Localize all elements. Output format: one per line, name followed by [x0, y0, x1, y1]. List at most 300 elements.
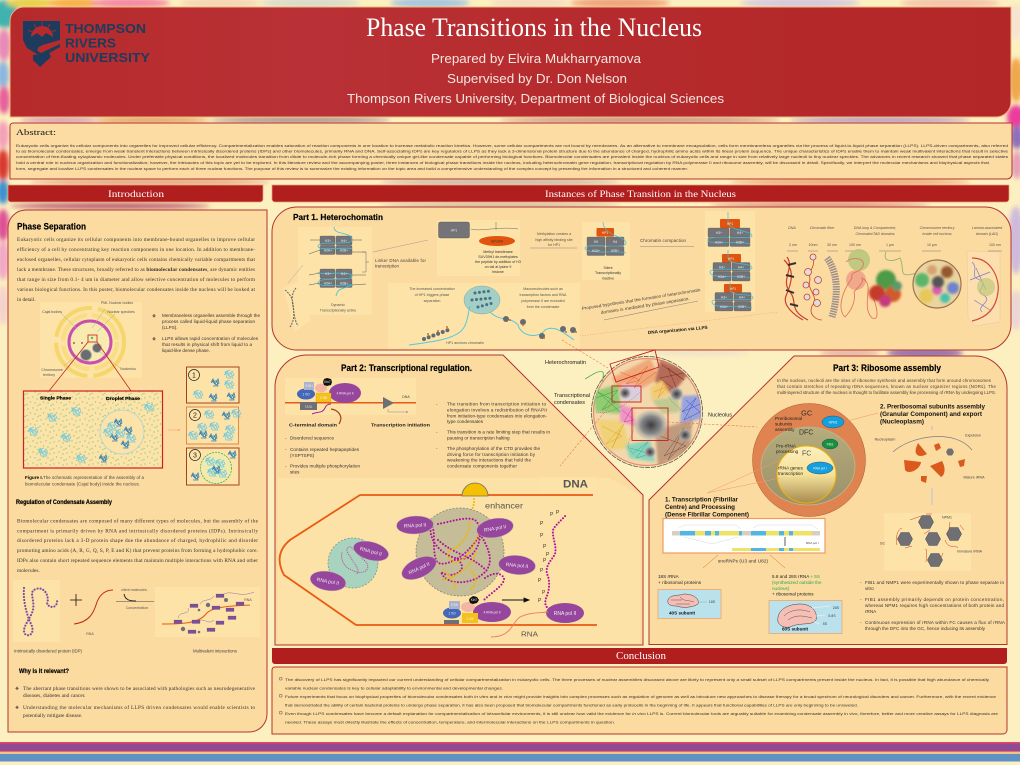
figure: silent nucleosome: Transcriptionally [595, 271, 621, 275]
transition bullets: This transition is a rate limiting step that results in [447, 430, 550, 434]
figure: transcription initiation complex [285, 378, 416, 415]
CTD bullets [285, 436, 360, 474]
figure: cell nucleus with cajal body: Nuclear speckles [107, 310, 135, 314]
relevance bullets [15, 686, 256, 719]
figure: silent nucleosome: HP1 [602, 231, 608, 235]
figure: compacted nucleosome stacks: H4+ [738, 266, 744, 270]
label: transcription initiation: Transcription initiation [371, 422, 430, 428]
authors and affiliation: Thompson Rivers University, Department of Biological Sciences [347, 91, 725, 106]
relevance bullets: ❖ [15, 686, 20, 691]
figure: nucleolus layers: transcription [778, 471, 803, 476]
DNA label: DNA [563, 478, 588, 490]
abstract text: form, segregate and localize LLPS condensates in the nuclear space to perform each of three nuclear functions. The purpose of this review is to summarize the existing information on the topic area and build a comprehensive understanding of the complex concept by presenting the information in a structured and coherent manner. [16, 167, 688, 171]
figure: immature rRNA in GC [880, 513, 983, 571]
authors and affiliation [347, 51, 725, 106]
polymerase complex at promoter: 4 RNA pol II [483, 610, 501, 614]
box 3: condensed droplet: 3 [193, 452, 197, 460]
figure: 60S subunit: 60S subunit [782, 626, 808, 632]
phosphorylated CTD [538, 510, 566, 610]
heading: step 1: Centre) and Processing [665, 504, 735, 511]
phosphorylated CTD: P [538, 598, 542, 604]
label: methylation creates HP1 binding site: Methylation creates a [537, 232, 571, 236]
figure: cell nucleus with cajal body: Nucleolus [120, 367, 136, 371]
figure: 40S subunit: 40S subunit [669, 610, 695, 616]
RNA transcript [491, 612, 548, 638]
figure: cell nucleus with cajal body: territory [43, 373, 55, 377]
section bar: instances: Instances of Phase Transition in the Nucleus [545, 189, 736, 200]
panel: part 1 heterochromatin [272, 207, 1011, 350]
figure: RNA strand: RNA [86, 632, 94, 636]
polymerase complex at promoter: Kin7 [471, 598, 477, 602]
figure: HP1 phase separation: separation [424, 299, 440, 303]
RNA pol II ellipses: RNA pol II [484, 524, 507, 534]
CTD bullets: Contains repeated heptapeptides [290, 447, 360, 452]
figure: SUV39H1 methylation: SUV39H1 de-methylates [478, 255, 518, 259]
panel: part 2 transcriptional regulation [275, 355, 643, 645]
part 3 bullets: FIB1 and NMP1 were experimentally shown to phase separate in [865, 580, 1004, 585]
figure: RNA strand [74, 590, 113, 636]
nucleus labels: condensates [554, 400, 585, 406]
RNA pol II ellipses: RNA pol II [408, 561, 431, 576]
phosphorylated CTD: P [550, 512, 554, 518]
intro paragraph: lack a membrane. These structures, broadly referred to as biomolecular condensates, are dynamic entities [17, 266, 255, 273]
figure: SUV39H1 methylation: the peptide by addition of H3 [475, 260, 521, 264]
section bar: conclusion [272, 648, 1007, 664]
header banner [10, 7, 1011, 117]
transition bullets: driving force for transcription initiation by [447, 452, 536, 457]
figure: immature rRNA in GC: GC [880, 542, 886, 546]
bullets: membraneless organelles: ❖ [152, 336, 157, 342]
part 3 bullets: rRNA [865, 609, 877, 614]
figure: compacted nucleosome stacks: H2B+ [736, 240, 744, 244]
chromatin scale bars: 10 µm [927, 243, 937, 247]
transition bullets: The transition from transcription initiation to [447, 402, 546, 406]
figure: SUV39H1 methylation: histone [492, 270, 504, 274]
chromatin scale labels [788, 226, 1003, 236]
abstract text: Eukaryotic cells organize its cellular components into organelles for improved cellular efficiency. Compartmentalization enables saturation of reaction components in one location to increase metabolic reaction kinetics. However, some cellular compartments are not bound by membranes. As an alternative to membrane encapsulation, cells form membraneless organelles via the process of liquid-to-liquid phase separation (LLPS). LLPS-driven compartments, also referred [16, 144, 1008, 148]
FIB1 marker: FIB1 [827, 442, 834, 446]
chromatin scale bars: 100 nm [849, 243, 861, 247]
figure caption: The schematic representation of the assembly of a [43, 475, 145, 480]
figure: immature rRNA in GC: Immature rRNA [957, 550, 983, 554]
figure: nucleolus layers [752, 404, 866, 516]
label: 5.8 and 28S rRNA: (synthesized outside the [772, 580, 822, 585]
label: snoRNPs: snoRNPs (U3 and U82) [718, 558, 768, 564]
authors and affiliation: Supervised by Dr. Don Nelson [447, 71, 627, 86]
enhancer [462, 483, 523, 522]
heading: part 1: Part 1. Heterochomatin [293, 212, 383, 222]
figure: SUV39H1 methylation [437, 220, 521, 276]
RNA pol II ellipses: RNA pol II [316, 577, 339, 587]
enhancer: enhancer [485, 502, 523, 510]
abstract text: concentration of free-floating cytoplasmic molecules. Under preferable physical conditions, the localized molecules transition from dilute to molecule-rich phase forming a chemically unique gel-like condensate capable of performing biological functions. Biomolecular condensates are prevalent inside the nucleus of eukaryotic cells and range in size from relatively large nucleoli to tiny nuclear speckles. The advances in recent research showed that phase separated states [16, 155, 1008, 159]
intro paragraph: enclosed organelles, cellular cytoplasm of eukaryotic cells contains chemically variable compartments that [17, 256, 256, 263]
bullets: membraneless organelles [152, 313, 260, 353]
transition bullets: elongation involves a redistribution of RNAPII [447, 408, 547, 412]
relevance bullets: Understanding the molecular mechanisms of LLPS driven condensates would enable scientists to [23, 704, 255, 711]
figure: silent nucleosome [582, 222, 630, 280]
label: 5.8 and 28S rRNA: + ribosomal proteins [772, 592, 814, 596]
polymerase complex at promoter: 5 BH [451, 603, 459, 607]
conclusion bullets: needed. These assays most directly illustrate the effects of concentration, temperature, and intermolecular interactions on the LLPS compartments in question. [285, 720, 615, 724]
figure: 60S subunit: 5S [823, 622, 828, 626]
figure: SUV39H1 methylation: on tail at lysine 9 [485, 265, 511, 269]
heading: step 1: (Dense Fibrillar Component) [665, 512, 749, 518]
figure: HP1 phase separation [388, 283, 580, 349]
label: C-terminal domain: C-terminal domain [289, 422, 337, 428]
figure: HP1 phase separation: transcription factors and RNA [520, 293, 567, 297]
figure: single phase and droplet phase: Droplet Phase [106, 396, 140, 402]
red selection boxes [610, 350, 668, 440]
figure: active nucleosomes: H4+ [341, 239, 347, 243]
figure: transcription initiation complex: Kin7 [324, 380, 331, 384]
figure: cell nucleus with cajal body: Chromosome [41, 368, 63, 372]
figure: rDNA transcription unit [663, 518, 825, 553]
figure: transcription initiation complex: 2 Mit [320, 396, 327, 400]
figure: HP1 phase separation: Macromolecules such as [523, 287, 563, 291]
intro paragraph: that range in size from 0.1- 4 um in diameter and allow selective concentration of molecules to perform [17, 276, 256, 283]
figure: single phase and droplet phase: Single Phase [40, 396, 71, 402]
figure: nucleolus layers: subunits [775, 422, 793, 426]
transition bullets: weakening the interactions that hold the [447, 458, 531, 462]
figure: SUV39H1 methylation: Methyl transferase [483, 250, 513, 254]
dotted connector [580, 312, 778, 336]
regulation paragraph [17, 518, 259, 574]
figure captions: Intrinsically disordered protein (IDP) [14, 648, 83, 654]
figure: 40S subunit: 18S [709, 600, 716, 604]
leader lines from nucleolus [707, 460, 780, 493]
elongating polymerase [546, 603, 584, 623]
CTD bullets: Provides multiple phosphorylation [290, 464, 360, 468]
box 1: dilute molecules [186, 367, 239, 403]
plus sign [70, 594, 82, 606]
figure: cell nucleus with cajal body: Cajal bodies [42, 310, 62, 314]
part 3 introduction: that contain stretches of repeating rDNA sequences, known as nuclear organizer regions (NORs). The [777, 384, 997, 389]
nucleus callout lines [560, 340, 757, 466]
figure: silent nucleosome: H2B+ [611, 249, 619, 253]
figure: compacted nucleosome stacks: H4+ [739, 296, 745, 300]
figure: mature rRNA expulsion: Expulsion [965, 434, 981, 438]
regulation paragraph: molecules. [17, 568, 40, 574]
chromatin scale bars: 10nm [808, 243, 818, 247]
label: DNA organization via LLPS: DNA organization via LLPS [648, 325, 708, 335]
relevance bullets: ❖ [15, 705, 20, 710]
footer stripes [0, 742, 1020, 762]
figure: nucleolus layers: Pre-rRNA [776, 444, 797, 448]
abstract heading: Abstract: [16, 128, 56, 137]
conclusion bullets: The discovery of LLPS has significantly impacted our current understanding of cellular compartmentalization in eukaryotic cells. The three processes of nuclear assemblies discussed above are likely to represent only a small subset of LLPS compartments present inside the nucleus. In fact, it is possible that high abundance of chemically [285, 677, 989, 682]
figure: transcription initiation complex: DNA [402, 395, 410, 399]
figure: immature rRNA in GC: NPM1 [942, 516, 952, 520]
transition bullets: The phosphorylation of the CTD provides the [447, 446, 540, 451]
chromatin scale bars: 30 nm [827, 243, 837, 247]
chromatin scale labels: Lamina-associated [972, 226, 1003, 230]
label: 18S rRNA: + ribosomal proteins [658, 580, 702, 585]
relevance bullets: diseases, diabetes and cancer. [23, 693, 86, 699]
part 3 bullets: - [860, 580, 862, 585]
figure: multivalent interactions [155, 587, 260, 637]
RNA pol I marker: RNA pol I [813, 466, 827, 470]
transition bullets: type condensates [447, 419, 484, 424]
heading: step 1: 1. Transcription (Fibrillar [665, 496, 739, 504]
chromatin scale bars: 2 nm [789, 243, 797, 247]
figure caption: biomolecular condensate (Cajal body) inside the nucleus. [25, 482, 140, 486]
conclusion bullets: variable nuclear condensates is key to cellular adaptability to environmental and developmental changes. [285, 686, 503, 690]
section bar: instances [272, 185, 1009, 202]
conclusion bullets: Even though LLPS condensates have become a default explanation for compartmentalization of intracellular environments, it is still unclear how valid the evidence for in vivo LLPS is. Current biomolecular tools are arguably suitable for examining condensate assembly in vivo, therefore, better and more creative assays for LLPS diagnosis are [285, 711, 999, 716]
figure captions [14, 648, 238, 654]
label: linker DNA: transcription [375, 264, 399, 268]
figure: active nucleosomes: H2A+ [324, 248, 332, 252]
panel: conclusion [272, 667, 1007, 734]
figure: active nucleosomes: H2A+ [324, 282, 332, 286]
RNA pol II ellipses: RNA pol II [505, 562, 528, 570]
figure: compacted nucleosome stacks: H2A+ [718, 275, 726, 279]
figure: nucleus with chromosome territories [545, 340, 757, 468]
intro paragraph: Eukaryotic cells organize its cellular components into membrane-bound organelles to improve cellular [17, 237, 255, 243]
figure: nucleolus layers: rRNA genes [778, 466, 803, 470]
logo: Thompson Rivers University: UNIVERSITY [65, 51, 151, 65]
NPM1 marker: NPM1 [829, 420, 838, 424]
bullets: membraneless organelles: liquid-like dense phase. [162, 348, 210, 353]
figure: silent nucleosome: H4 [613, 240, 617, 244]
abstract panel [10, 123, 1012, 179]
figure: SUV39H1 methylation: SUV39H [491, 240, 504, 244]
chromatin scale bars: 1 µm [886, 243, 894, 247]
RNA pol II ellipses: RNA pol II [404, 522, 426, 530]
small condensate [328, 538, 378, 588]
relevance bullets: The aberrant phase transitions were shown to be associated with pathologies such as neurodegenerative [23, 686, 256, 692]
figure: DNA helix [283, 265, 311, 332]
phosphorylated CTD: P [543, 544, 547, 550]
transition bullets: pausing or transcription halting [447, 436, 510, 440]
phosphorylated CTD: P [540, 568, 544, 574]
box 2: clustering molecules: 2 [193, 412, 197, 420]
heading: phase separation: Phase Separation [17, 222, 86, 232]
figure: compacted nucleosome stacks: H4+ [737, 231, 743, 235]
figure: compacted nucleosome stacks: H2B+ [737, 275, 745, 279]
figure: compacted nucleosome stacks: H2A+ [720, 305, 728, 309]
regulation paragraph: disordered proteins lack a 3-D protein shape due the abundance of charged, hydrophilic and disorder [17, 537, 258, 544]
arrow: C-terminal domain [331, 409, 341, 424]
figure: compacted nucleosome stacks [705, 211, 755, 312]
conclusion bullets: Future experiments that focus on biophysical properties of biomolecular condensates both in vitro and in vivo might provide insights into complex processes such as regulation of genome as well as introduce new approaches to disease therapy for a broad spectrum of neurological disorders and cancer. Furthermore, with the recent evidence [285, 694, 997, 699]
figure: transcription initiation complex: 1 XO [302, 392, 310, 396]
heading: regulation of condensate assembly: Regulation of Condensate Assembly [16, 499, 112, 506]
figure: compacted nucleosome stacks: H2A+ [715, 240, 723, 244]
heading: step 1 [665, 496, 749, 518]
polymerase complex at promoter: 2 Mit [467, 617, 474, 621]
heading: step 2: (Granular Component) and export [880, 411, 983, 418]
figure: nucleolus layers: DFC [799, 430, 813, 436]
chromatin scale labels: DNA loop & Compartment, [854, 226, 896, 230]
CTD bullets: (YSPTSPS) [290, 453, 315, 458]
CTD bullets: sites [290, 470, 300, 474]
figure: active nucleosomes [298, 227, 372, 315]
regulation paragraph: IDPs also contain short repeated sequence elements that maintain multiple interactions with RNA and other [17, 558, 258, 564]
transition bullets: - [436, 430, 438, 434]
bullets: membraneless organelles: Membraneless organelles assemble through the [162, 313, 260, 318]
figure: compacted nucleosome stacks: H3+ [719, 266, 725, 270]
bullets: membraneless organelles: ❖ [152, 314, 157, 318]
part 3 introduction: In the nucleus, nucleoli are the sites of ribosome synthesis and assembly that form around chromosomes [777, 378, 992, 383]
large condensate [416, 508, 504, 600]
transition bullets: from initiation-type condensates into elongation- [447, 414, 547, 418]
chart: client molecules vs concentration: Concentration [126, 606, 148, 610]
section bar: conclusion: Conclusion [616, 651, 666, 662]
zoom lines [49, 342, 131, 391]
chart: client molecules vs concentration [116, 588, 154, 610]
chart: client molecules vs concentration: client molecules [121, 588, 147, 592]
phosphorylated CTD: P [556, 510, 560, 516]
figure: single phase and droplet phase [24, 391, 162, 468]
bullets: membraneless organelles: that results in physical shift from liquid to a [162, 342, 252, 347]
figure: HP1 phase separation: from the condensate [527, 305, 559, 309]
part 3 bullets: - [860, 597, 862, 602]
figure: condensates on DNA [278, 477, 640, 643]
abstract text [16, 144, 1008, 171]
figure: active nucleosomes: H2B+ [340, 248, 348, 252]
nucleus labels: Nucleolus [708, 412, 732, 418]
figure: compacted nucleosome stacks: H2B+ [738, 305, 746, 309]
heading: part 3: Part 3: Ribosome assembly [833, 363, 941, 373]
phosphorylated CTD: P [538, 578, 542, 584]
part 3 introduction: multi-layered structure of the nucleus is thought to facilitate assembly line processing of rRNA by undergoing LLPS. [777, 390, 996, 395]
conclusion bullets [280, 677, 999, 724]
CTD bullets: - [285, 436, 287, 440]
figure: compacted nucleosome stacks: HP1 [727, 222, 733, 226]
logo: Thompson Rivers University: RIVERS [65, 36, 116, 50]
conclusion bullets: that demonstrated the ability of certain bacterial proteins to undergo phase separation, it has also been proposed that biomolecular compartments functioned as early protocells in the beginning of life. It appears that functional capabilities of LLPS are only beginning to be unraveled. [285, 702, 858, 708]
chromatin scale bars [787, 243, 1002, 251]
label: methylation creates HP1 binding site: for HP1 [548, 243, 560, 247]
regulation paragraph: Biomolecular condensates are composed of many different types of molecules, but the assembly of the [17, 518, 259, 524]
phosphorylated CTD: P [543, 558, 547, 564]
chromatin scale labels: Chromosome territory [920, 226, 955, 230]
panel: introduction [8, 210, 267, 732]
abstract text: to as biomolecular condensates, emerge from weak transient interactions between intrinsically disordered proteins (IDPs) and other biomolecules, primarily RNA and DNA. Self-associating IDPs are key regulators of LLPS as they lack a 3-dimensional protein structure due to the abundance of charged, hydrophilic amino acids within its linear protein sequence. The unique characteristics of IDPs enable them to maintain weak multivalent interactions that result in selective [16, 150, 1008, 154]
panel: part 3 ribosome assembly [649, 356, 1007, 644]
logo: Thompson Rivers University [23, 21, 151, 67]
logo: Thompson Rivers University: THOMPSON [65, 22, 146, 36]
figure: silent nucleosome: H2A+ [592, 249, 600, 253]
arrow to subunit assembly [847, 413, 878, 421]
figure captions: Multivalent interactions [193, 648, 238, 654]
figure: silent nucleosome: Silent [604, 266, 612, 270]
chromatin scale labels: domain (LAD) [976, 232, 998, 236]
figure: IDP chain [13, 580, 60, 642]
part 3 bullets: - [860, 620, 862, 625]
part 3 bullets: FIB1 assembly primarily depends on protein concentration, [865, 597, 1004, 602]
heading: step 2 [880, 404, 985, 426]
regulation paragraph: promoting amino acids (A, R, G, Q, S, P, E and K) that prevent proteins from forming a hydrophobic core. [17, 547, 258, 554]
abstract text: hold a central role in nucleus organization and functionalization; however, the intricacies of this topic are yet to be explored. In this literature review and the accompanying poster, three instances of biological phase transitions inside the nucleus, including heterochromatin gene regulation, transcriptional regulation by RNA polymerase II and ribosome assembly, will be discussed in detail. Specifically, we interpret the molecular mechanisms and biophysical aspects that [16, 161, 989, 165]
figure: silent nucleosome: inactive [602, 276, 614, 280]
label: 18S rRNA [658, 574, 702, 585]
box 1: dilute molecules: 1 [192, 372, 196, 380]
section bar: introduction [8, 185, 263, 202]
elongating polymerase: RNA pol II [554, 611, 576, 617]
label: 5.8 and 28S rRNA: 5.8 and 28S rRNA + 5S [772, 574, 820, 579]
part 3 introduction [777, 378, 997, 395]
figure: chromatin organization levels [784, 249, 1000, 326]
figure: cell nucleus with cajal body: PML Nuclear bodies [101, 301, 133, 305]
figure: nucleolus layers: processing [776, 449, 799, 454]
figure: multivalent interactions: RNA [244, 598, 252, 602]
arrow: phase progression [168, 429, 180, 431]
chromatin scale labels: inside cell nucleus [922, 232, 952, 236]
chromatin scale labels: DNA [788, 226, 796, 230]
part 3 bullets: vitro [865, 586, 874, 591]
section bar: introduction: Introduction [108, 190, 164, 200]
label: proposed hypothesis: domains is mediated by phase separation. [600, 296, 690, 315]
nucleus labels: Heterochromatin [545, 360, 586, 366]
heading: why is it relevant: Why is it relevant? [19, 668, 69, 675]
intro paragraph [17, 237, 256, 303]
figure: HP1 phase separation: of HP1 triggers phase [415, 293, 449, 297]
label: proposed hypothesis: Proposed hypothesis that the formation of heterochromatin [581, 287, 701, 311]
figure: transcription initiation complex: 4 RNA pol II [336, 392, 354, 396]
chromatin scale bars: 100 nm [989, 243, 1001, 247]
part 3 bullets: Continuous expression of rRNA within FC causes a flux of rRNA [865, 620, 1006, 625]
RNA pol II ellipses: RNA pol II [359, 546, 382, 558]
label: linker DNA: Linker DNA available for [375, 258, 427, 263]
phosphorylated CTD: P [540, 521, 544, 527]
figure: mature rRNA expulsion: Nucleoplasm [875, 438, 895, 442]
chromatin scale labels: Chromatin/TAD domains [855, 232, 895, 236]
authors and affiliation: Prepared by Elvira Mukharryamova [431, 51, 642, 66]
label: methylation creates HP1 binding site: high affinity binding site [535, 238, 573, 242]
part 3 bullets [860, 580, 1006, 631]
figure: 60S subunit: 28S [833, 606, 840, 610]
figure: mature rRNA expulsion [875, 426, 985, 505]
transition bullets [436, 402, 550, 468]
intro paragraph: in detail. [17, 297, 36, 303]
label: 5.8 and 28S rRNA [772, 574, 822, 596]
figure: nucleolus layers: assembly [775, 427, 795, 432]
figure: active nucleosomes: Transcriptionally active [320, 308, 356, 312]
label: chromatin compaction: Chromatin compaction [640, 238, 687, 243]
figure: SUV39H1 methylation: HP1 [451, 228, 457, 232]
box 2: clustering molecules [186, 407, 241, 444]
arrow: elongation [502, 598, 529, 602]
label: linker DNA [373, 240, 428, 268]
label: methylation creates HP1 binding site [530, 232, 577, 248]
heading: step 2: 2. Preribosomal subunits assembly [880, 404, 985, 410]
figure: 60S subunit: 5.8S [828, 614, 836, 618]
label: snoRNPs [703, 555, 785, 568]
regulation paragraph: compartment is primarily driven by RNA and intrinsically disordered proteins (IDPs). Intrinsically [17, 528, 258, 534]
title: Phase Transitions in the Nucleus [366, 13, 702, 42]
figure: compacted nucleosome stacks: HP1 [728, 257, 734, 261]
phosphorylated CTD: P [542, 590, 546, 596]
figure caption [25, 475, 145, 486]
bullets: membraneless organelles: (LLPS). [162, 325, 178, 330]
figure: silent nucleosome: H3 [594, 240, 598, 244]
figure: 60S subunit [769, 600, 842, 634]
figure: transcription initiation complex: 5 BH [305, 384, 313, 388]
heading: step 2: (Nucleoplasm) [880, 418, 924, 426]
nucleus labels: Transcriptional [554, 393, 590, 399]
figure: active nucleosomes: Dynamic [331, 303, 345, 307]
relevance bullets: potentially mitigate disease. [23, 713, 82, 719]
figure: transcription initiation complex: TATA [305, 405, 313, 409]
RNA pol II ellipses [309, 515, 536, 593]
RNA transcript: RNA [521, 630, 538, 638]
figure: 40S subunit [658, 590, 721, 618]
part 3 bullets: whereas NPM1 requires high concentrations of both protein and [865, 603, 1004, 608]
label: 18S rRNA: 18S rRNA [658, 574, 680, 579]
